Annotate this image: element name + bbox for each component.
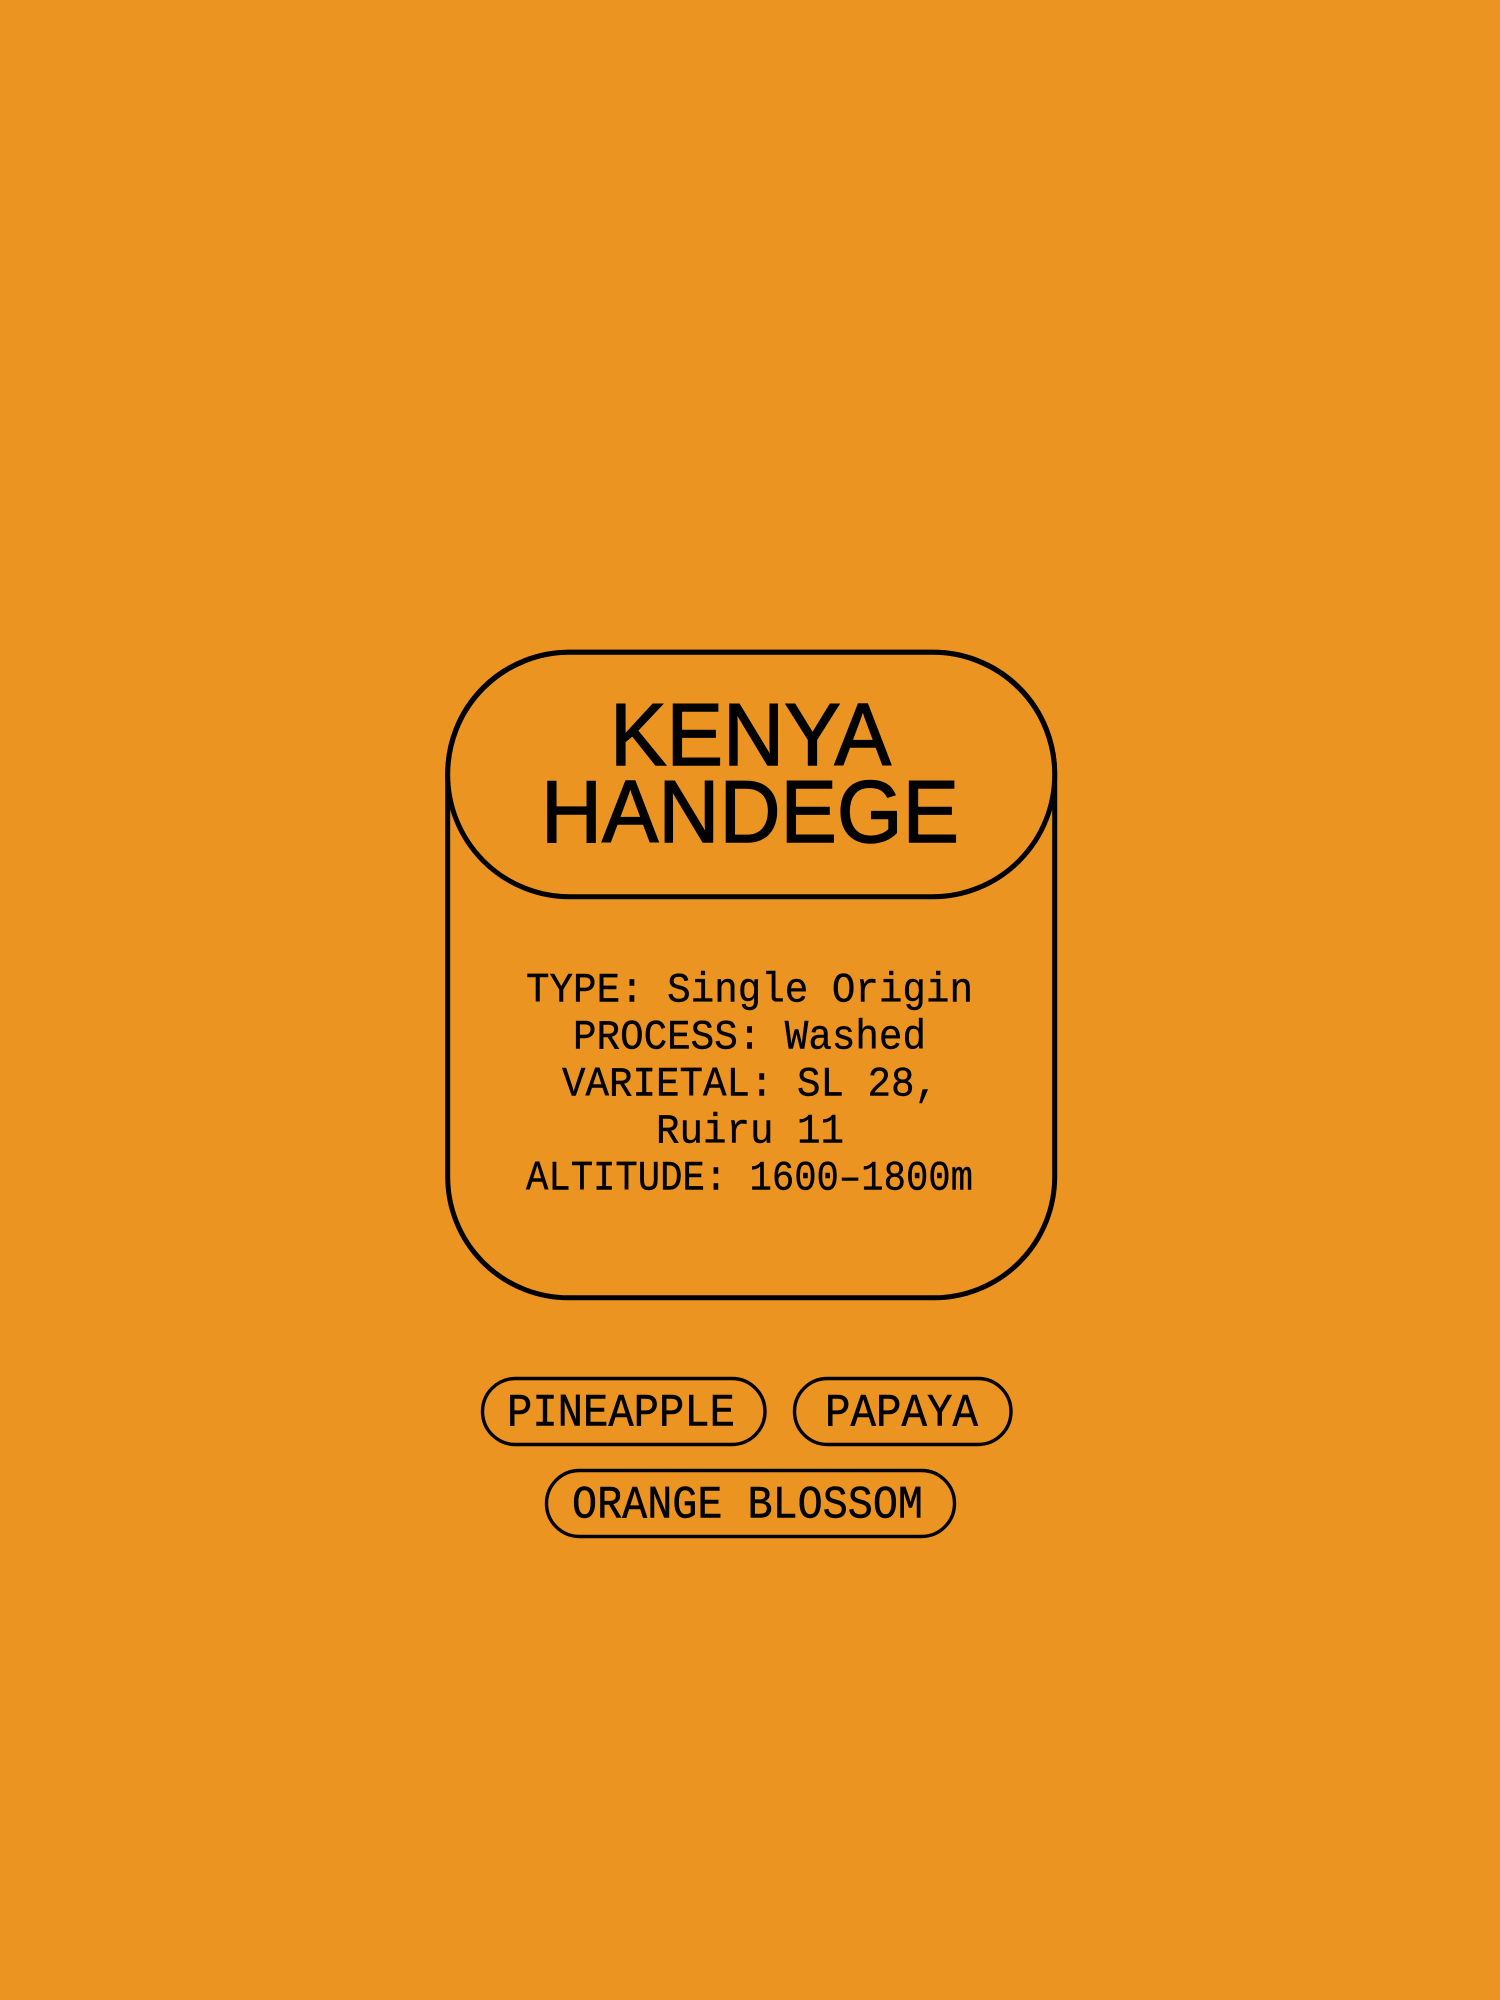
tasting note tag: papaya: PAPAYA [825,1388,978,1440]
tasting note tag: papaya [794,1378,1011,1444]
panel: coffee label card [448,652,1055,1298]
tasting note tag: pineapple: PINEAPPLE [507,1388,735,1440]
coffee details text: ALTITUDE: 1600–1800m [526,1154,973,1202]
coffee details text: VARIETAL: SL 28, [562,1060,938,1108]
title: Kenya Handege: HANDEGE [541,762,959,861]
tasting note tag: orange blossom: ORANGE BLOSSOM [572,1480,923,1532]
title: Kenya Handege: KENYA [610,685,891,784]
title: Kenya Handege [541,685,959,861]
title pill [448,652,1055,897]
coffee details text [526,966,973,1202]
coffee details text: Ruiru 11 [656,1108,844,1156]
tasting note tag: pineapple [482,1378,765,1444]
card outline [448,652,1055,1298]
coffee details text: PROCESS: Washed [573,1014,926,1062]
coffee details text: TYPE: Single Origin [526,966,973,1014]
